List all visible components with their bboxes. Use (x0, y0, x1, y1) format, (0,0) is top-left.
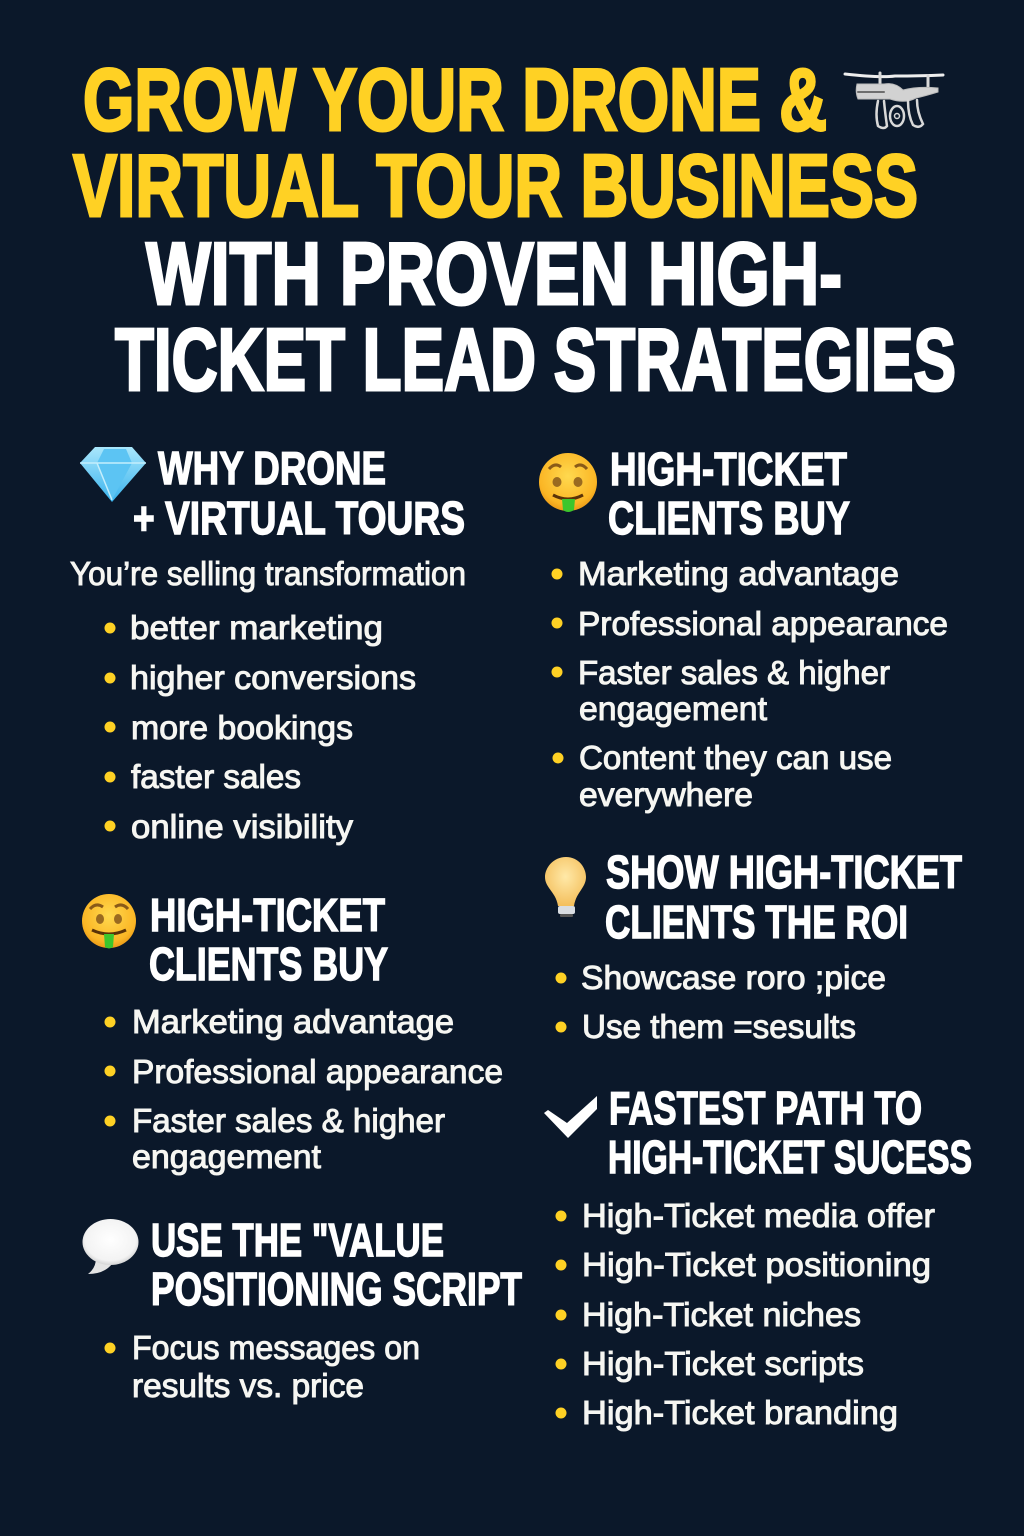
list: Showcase roro ;pice (581, 959, 886, 996)
list: Use them =sesults (582, 1008, 856, 1045)
list: online visibility (131, 808, 354, 845)
list (556, 959, 886, 1045)
panel: value positioning script (82, 1214, 522, 1404)
list: higher conversions (130, 659, 416, 696)
heading: CLIENTS THE ROI (605, 896, 908, 948)
panel: why drone + virtual tours (70, 442, 466, 845)
list: Professional appearance (578, 605, 948, 642)
heading: POSITIONING SCRIPT (151, 1263, 522, 1315)
icon: speech bubble (82, 1219, 138, 1274)
icon: light bulb (545, 857, 586, 917)
heading (151, 1214, 522, 1315)
list: better marketing (130, 609, 383, 646)
list: High-Ticket niches (582, 1296, 861, 1333)
panel: high-ticket clients buy (right) (539, 443, 948, 813)
list (104, 609, 416, 845)
list: Marketing advantage (578, 555, 899, 592)
list: results vs. price (132, 1367, 364, 1404)
list: Professional appearance (132, 1053, 503, 1090)
list: High-Ticket positioning (582, 1246, 931, 1283)
intro text: You’re selling transformation (70, 555, 466, 592)
list: engagement (579, 690, 767, 727)
heading (608, 1082, 972, 1183)
icon: money-mouth face (82, 894, 136, 948)
list (556, 1197, 935, 1431)
heading: USE THE "VALUE (151, 1214, 444, 1266)
icon: check mark (544, 1096, 597, 1138)
list: Marketing advantage (132, 1003, 454, 1040)
list (104, 1003, 503, 1175)
list: High-Ticket branding (582, 1394, 898, 1431)
panel: fastest path to high-ticket success (544, 1082, 972, 1431)
icon: drone (845, 73, 943, 128)
heading: HIGH-TICKET (610, 443, 847, 495)
icon: money-mouth face (539, 453, 597, 512)
heading: FASTEST PATH TO (609, 1082, 922, 1134)
heading (149, 889, 388, 990)
list: High-Ticket media offer (582, 1197, 935, 1234)
list: faster sales (131, 758, 301, 795)
list: more bookings (131, 709, 353, 746)
panel: high-ticket clients buy (left) (82, 889, 503, 1175)
icon: diamond (80, 447, 146, 502)
list: High-Ticket scripts (582, 1345, 864, 1382)
list: Focus messages on (132, 1329, 420, 1366)
heading: + VIRTUAL TOURS (133, 492, 465, 544)
title: WITH PROVEN HIGH- (146, 224, 842, 323)
heading: CLIENTS BUY (608, 492, 850, 544)
list: Faster sales & higher (578, 654, 890, 691)
list (104, 1329, 420, 1404)
title (73, 50, 956, 409)
heading: WHY DRONE (158, 442, 386, 494)
list: Faster sales & higher (132, 1102, 445, 1139)
heading (605, 846, 962, 948)
panel: show high-ticket clients the ROI (545, 846, 962, 1045)
list: engagement (132, 1138, 321, 1175)
list: Content they can use (579, 739, 892, 776)
heading (133, 442, 465, 544)
heading: CLIENTS BUY (149, 938, 388, 990)
heading (608, 443, 850, 544)
list (552, 555, 948, 813)
list: everywhere (579, 776, 753, 813)
heading: HIGH-TICKET (150, 889, 385, 941)
